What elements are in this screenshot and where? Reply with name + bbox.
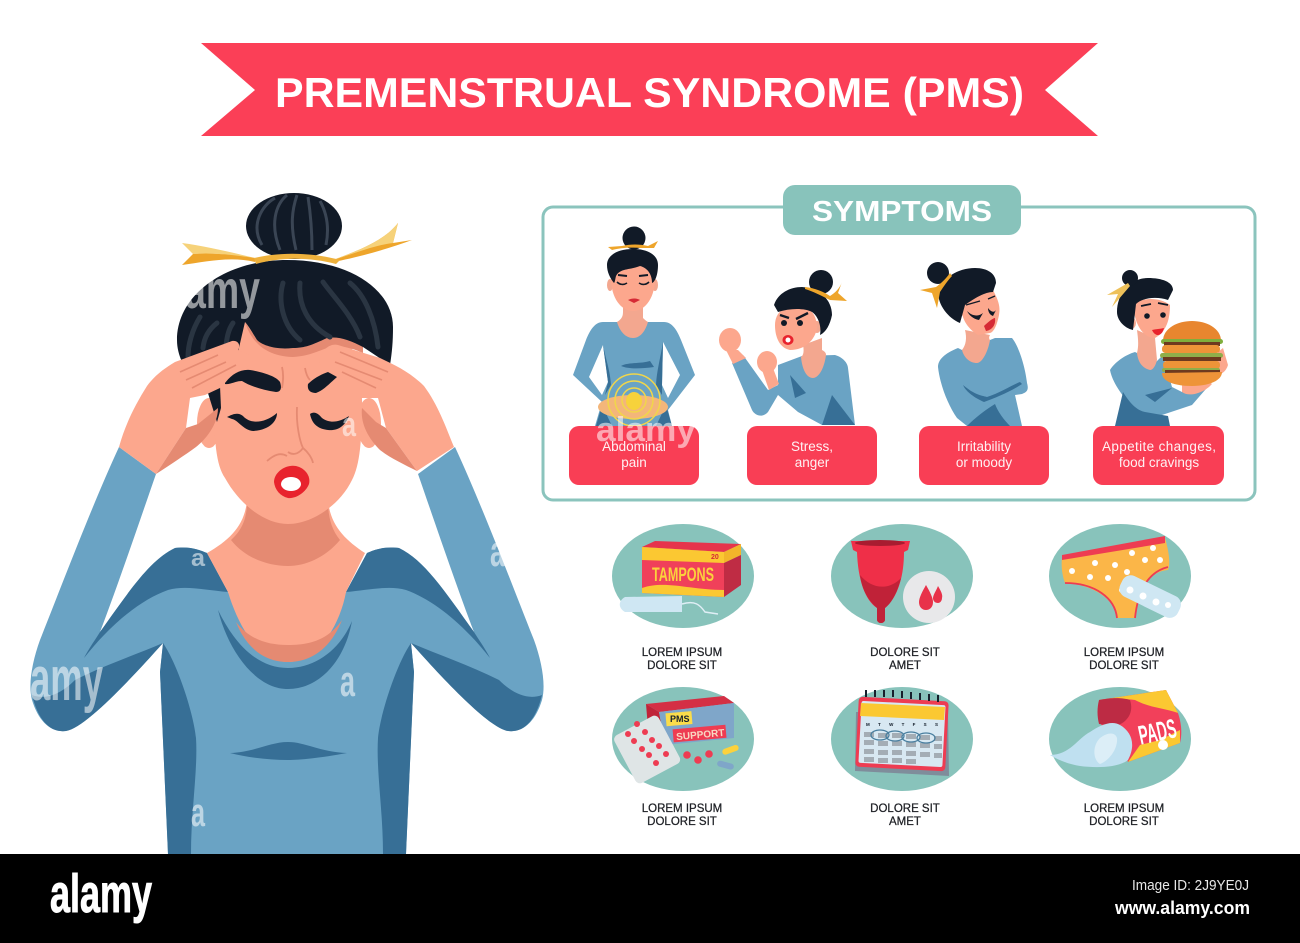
product: PMS support pills: SUPPORT	[676, 728, 725, 743]
symptom label: irritability: Irritability	[957, 439, 1011, 454]
nose and wrinkles	[267, 367, 313, 463]
bun	[246, 193, 342, 259]
ribbon	[182, 223, 412, 265]
caption: DOLORE SIT	[647, 816, 717, 828]
symptom label: appetite changes: Appetite changes,	[1102, 439, 1216, 454]
footer image id: Image ID: 2J9YE0J	[1132, 877, 1249, 894]
caption: AMET	[889, 816, 921, 828]
watermarks: a	[490, 527, 505, 576]
figure: appetite changes	[1107, 270, 1228, 426]
right hand	[320, 345, 454, 471]
left half of the shirt	[30, 447, 288, 854]
title banner	[201, 43, 1098, 136]
symptoms heading	[783, 185, 1021, 235]
symptoms heading: SYMPTOMS	[812, 196, 992, 228]
face	[214, 305, 363, 524]
product: calendar: M T W T F S S	[866, 722, 938, 727]
symptom label: abdominal pain: pain	[621, 455, 647, 470]
neck and chest	[207, 500, 365, 760]
eyebrows	[225, 370, 337, 393]
right half of the shirt	[286, 447, 544, 854]
symptom label: stress, anger	[747, 426, 877, 485]
figure: irritability	[920, 262, 1028, 426]
caption: DOLORE SIT	[870, 647, 940, 659]
caption	[1084, 647, 1164, 672]
caption: LOREM IPSUM	[642, 803, 722, 815]
watermarks	[30, 260, 696, 835]
product: pads	[1049, 687, 1191, 791]
product: tampons: 20	[711, 554, 719, 561]
symptoms panel	[543, 185, 1255, 500]
product: PMS support pills	[612, 687, 754, 791]
title: PREMENSTRUAL SYNDROME (PMS)	[275, 69, 1024, 116]
product: pads: PADS	[1136, 713, 1179, 751]
product: calendar	[831, 687, 973, 791]
figure: stress and anger	[719, 270, 855, 425]
caption: DOLORE SIT	[647, 660, 717, 672]
caption	[870, 647, 940, 672]
footer logo: alamy	[50, 864, 152, 924]
symptom label: stress, anger: anger	[795, 455, 830, 470]
product: menstrual cup	[831, 524, 973, 628]
symptom label: abdominal pain: Abdominal	[602, 439, 666, 454]
symptom label: abdominal pain	[569, 426, 699, 485]
closed eyes	[227, 413, 349, 431]
footer bar	[0, 854, 1300, 943]
symptom label: appetite changes: food cravings	[1119, 455, 1199, 470]
caption	[1084, 803, 1164, 828]
caption: DOLORE SIT	[1089, 660, 1159, 672]
caption	[642, 647, 722, 672]
product: tampons	[612, 524, 754, 628]
symptom label: irritability	[919, 426, 1049, 485]
caption: LOREM IPSUM	[642, 647, 722, 659]
watermarks: a	[191, 545, 206, 572]
watermarks: amy	[185, 260, 260, 320]
mouth	[274, 466, 309, 498]
product: PMS support pills: PMS	[670, 714, 690, 724]
watermarks: alamy	[596, 411, 696, 449]
caption: DOLORE SIT	[870, 803, 940, 815]
burger	[1160, 321, 1223, 386]
main illustration: woman with headache	[30, 193, 544, 854]
symptom label: irritability: or moody	[956, 455, 1012, 470]
caption: LOREM IPSUM	[1084, 647, 1164, 659]
footer url: www.alamy.com	[1114, 898, 1250, 918]
ears	[197, 398, 381, 448]
caption	[870, 803, 940, 828]
watermarks: a	[191, 791, 205, 835]
symptom label: appetite changes	[1093, 426, 1224, 485]
watermarks: amy	[30, 645, 103, 714]
figure: abdominal pain	[573, 226, 695, 426]
caption: LOREM IPSUM	[1084, 803, 1164, 815]
watermarks: a	[342, 406, 357, 444]
hair	[177, 260, 393, 422]
symptom label: stress, anger: Stress,	[791, 439, 833, 454]
product: underwear with liner	[1049, 524, 1191, 628]
left hand	[119, 341, 252, 474]
caption: DOLORE SIT	[1089, 816, 1159, 828]
watermarks: a	[340, 657, 355, 706]
product: tampons: TAMPONS	[652, 565, 714, 586]
caption	[642, 803, 722, 828]
caption: AMET	[889, 660, 921, 672]
